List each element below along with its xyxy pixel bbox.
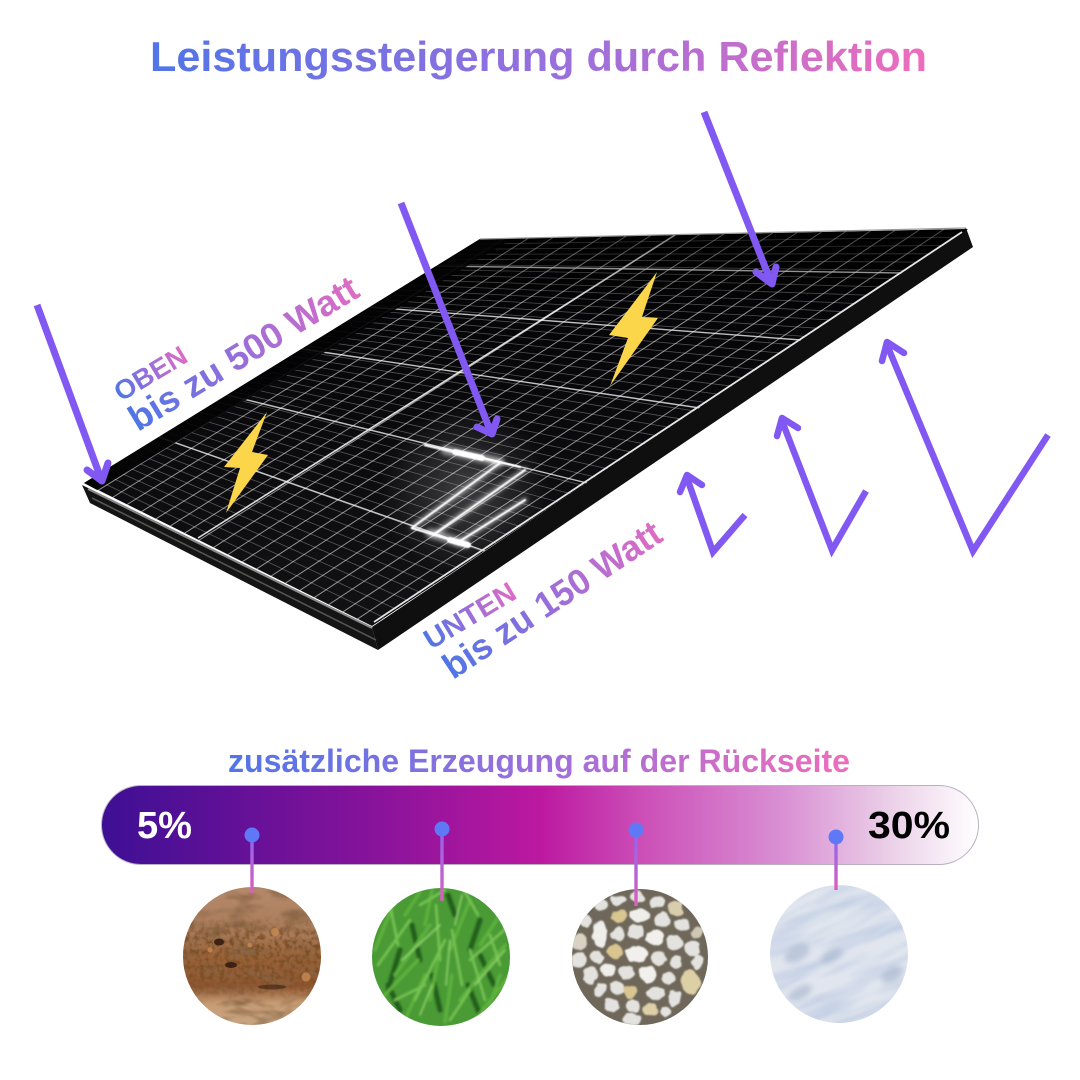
label: OBEN: OBEN xyxy=(109,340,193,407)
label: bis zu 150 Watt: bis zu 150 Watt xyxy=(435,512,669,687)
panel cell grid xyxy=(92,230,956,619)
panel frame: front left side xyxy=(82,485,378,650)
panel frame: right side xyxy=(372,228,973,650)
panel surface xyxy=(84,229,968,626)
panel front edge highlights xyxy=(88,228,966,640)
dark band along back edge xyxy=(84,239,512,490)
pin: grass xyxy=(434,822,450,901)
subtitle: zusätzliche Erzeugung auf der Rückseite xyxy=(228,743,850,779)
arrow: reflected light large xyxy=(882,342,1048,551)
title: Leistungssteigerung durch Reflektion xyxy=(150,33,927,80)
photo: grass xyxy=(372,888,510,1026)
label: bis zu 500 Watt: bis zu 500 Watt xyxy=(121,267,366,439)
photo: soil xyxy=(183,887,321,1025)
arrow: incoming sunlight right xyxy=(704,112,776,284)
pin: soil xyxy=(244,828,260,893)
photo: gravel xyxy=(572,889,708,1025)
dark shade over far end of panel xyxy=(84,229,968,626)
photo: snow xyxy=(770,885,908,1023)
arrow: incoming sunlight left xyxy=(37,305,108,481)
label: UNTEN: UNTEN xyxy=(418,576,522,655)
gradient scale bar xyxy=(102,786,978,864)
sun reflection lines xyxy=(412,445,525,545)
sun reflection glow xyxy=(84,229,968,626)
solar panel xyxy=(82,228,973,650)
arrow: incoming sunlight centre xyxy=(401,203,497,434)
arrow: reflected light small xyxy=(680,475,745,552)
icon: lightning bolt right xyxy=(609,272,658,386)
icon: lightning bolt left xyxy=(224,412,268,513)
pin: gravel xyxy=(628,822,644,906)
label: 5%: 5% xyxy=(137,805,192,847)
sun reflection halo xyxy=(413,450,525,544)
label: 30%: 30% xyxy=(868,805,950,847)
arrow: reflected light medium xyxy=(777,418,866,550)
pin: snow xyxy=(828,830,844,890)
